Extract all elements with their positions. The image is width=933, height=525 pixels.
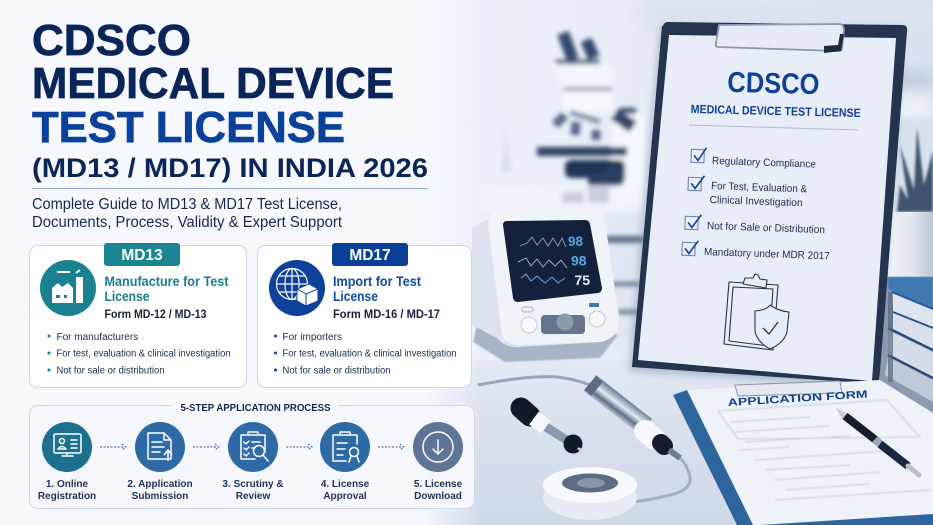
checklist: Mandatory under MDR 2017	[704, 246, 830, 262]
title: (MD13 / MD17) IN INDIA 2026	[32, 153, 428, 183]
MD17 badge	[332, 243, 408, 266]
panel: MD13	[30, 243, 246, 388]
application form	[673, 380, 933, 525]
application form: APPLICATION FORM	[727, 388, 868, 409]
clipboard heading	[691, 66, 862, 120]
panel: 5-step process	[30, 400, 474, 508]
step 3	[222, 422, 284, 502]
books	[880, 277, 933, 420]
monitor readings: 98	[571, 252, 587, 268]
monitor readings: 98	[568, 234, 584, 249]
probes and sensor	[478, 377, 690, 520]
checklist	[682, 147, 830, 262]
step 4: 4. License	[321, 479, 370, 490]
beaker, blurred	[500, 125, 512, 172]
panel: MD17	[258, 243, 472, 388]
arrow 4	[378, 444, 404, 450]
step 2	[127, 422, 193, 502]
step 3: 3. Scrutiny &	[222, 479, 284, 490]
step 1: Registration	[38, 491, 96, 502]
MD13 bullets: For test, evaluation & clinical investigation	[56, 348, 230, 360]
MD17 bullets: Not for sale or distribution	[282, 366, 390, 376]
MD17 heading: Import for Test	[333, 273, 421, 289]
MD13 badge: MD13	[121, 247, 163, 264]
MD13 heading	[104, 273, 229, 321]
MD13 bullets: For manufacturers	[56, 332, 138, 343]
icon: globe and box	[269, 260, 325, 316]
step 2: 2. Application	[127, 479, 193, 490]
MD13 badge	[104, 243, 180, 266]
title	[32, 16, 428, 183]
shelf shadows, blurred	[605, 108, 645, 314]
icon: clipboard with shield	[724, 274, 789, 350]
step 2: Submission	[132, 491, 188, 502]
process heading: 5-STEP APPLICATION PROCESS	[180, 403, 331, 414]
MD17 bullets: For test, evaluation & clinical investigation	[282, 348, 456, 360]
plant	[888, 118, 933, 277]
arrow 1	[100, 444, 126, 450]
checklist: Not for Sale or Distribution	[707, 220, 825, 236]
step 5: Download	[414, 491, 462, 502]
MD17 heading: License	[333, 288, 378, 304]
step 3: Review	[236, 491, 270, 502]
MD13 bullets	[48, 332, 230, 376]
step 5	[413, 422, 463, 502]
metal clip	[716, 24, 844, 53]
step 4	[320, 422, 370, 502]
MD17 bullets: For importers	[282, 332, 342, 343]
monitor readings: 75	[574, 272, 590, 288]
icon: factory	[40, 260, 96, 316]
clipboard heading: MEDICAL DEVICE TEST LICENSE	[691, 102, 861, 120]
checklist: For Test, Evaluation &	[711, 180, 807, 195]
arrow 2	[193, 444, 219, 450]
step 1: 1. Online	[46, 479, 89, 490]
MD13 heading: Form MD-12 / MD-13	[104, 307, 207, 321]
subtitle	[32, 196, 343, 231]
MD13 heading: Manufacture for Test	[104, 273, 229, 289]
MD13 bullets: Not for sale or distribution	[56, 366, 164, 376]
clipboard heading: CDSCO	[727, 67, 820, 101]
MD13 heading: License	[104, 288, 150, 304]
checklist: Regulatory Compliance	[712, 155, 816, 171]
step 5: 5. License	[414, 479, 463, 490]
patient monitor	[472, 207, 619, 362]
step 4: Approval	[323, 491, 367, 502]
MD17 heading: Form MD-16 / MD-17	[333, 307, 440, 321]
MD17 bullets	[274, 332, 456, 376]
microscope	[480, 33, 644, 212]
MD17 badge: MD17	[349, 247, 391, 264]
clipboard with checklist	[629, 22, 907, 387]
arrow 3	[286, 444, 312, 450]
title: TEST LICENSE	[32, 103, 345, 152]
MD17 heading	[333, 273, 440, 321]
pen	[836, 408, 919, 475]
subtitle: Complete Guide to MD13 & MD17 Test License,	[32, 196, 342, 213]
subtitle: Documents, Process, Validity & Expert Support	[32, 214, 343, 231]
monitor readings	[568, 234, 590, 288]
step 1	[38, 422, 96, 502]
title: CDSCO	[32, 16, 191, 65]
title: MEDICAL DEVICE	[32, 59, 394, 108]
checklist: Clinical Investigation	[709, 194, 803, 209]
